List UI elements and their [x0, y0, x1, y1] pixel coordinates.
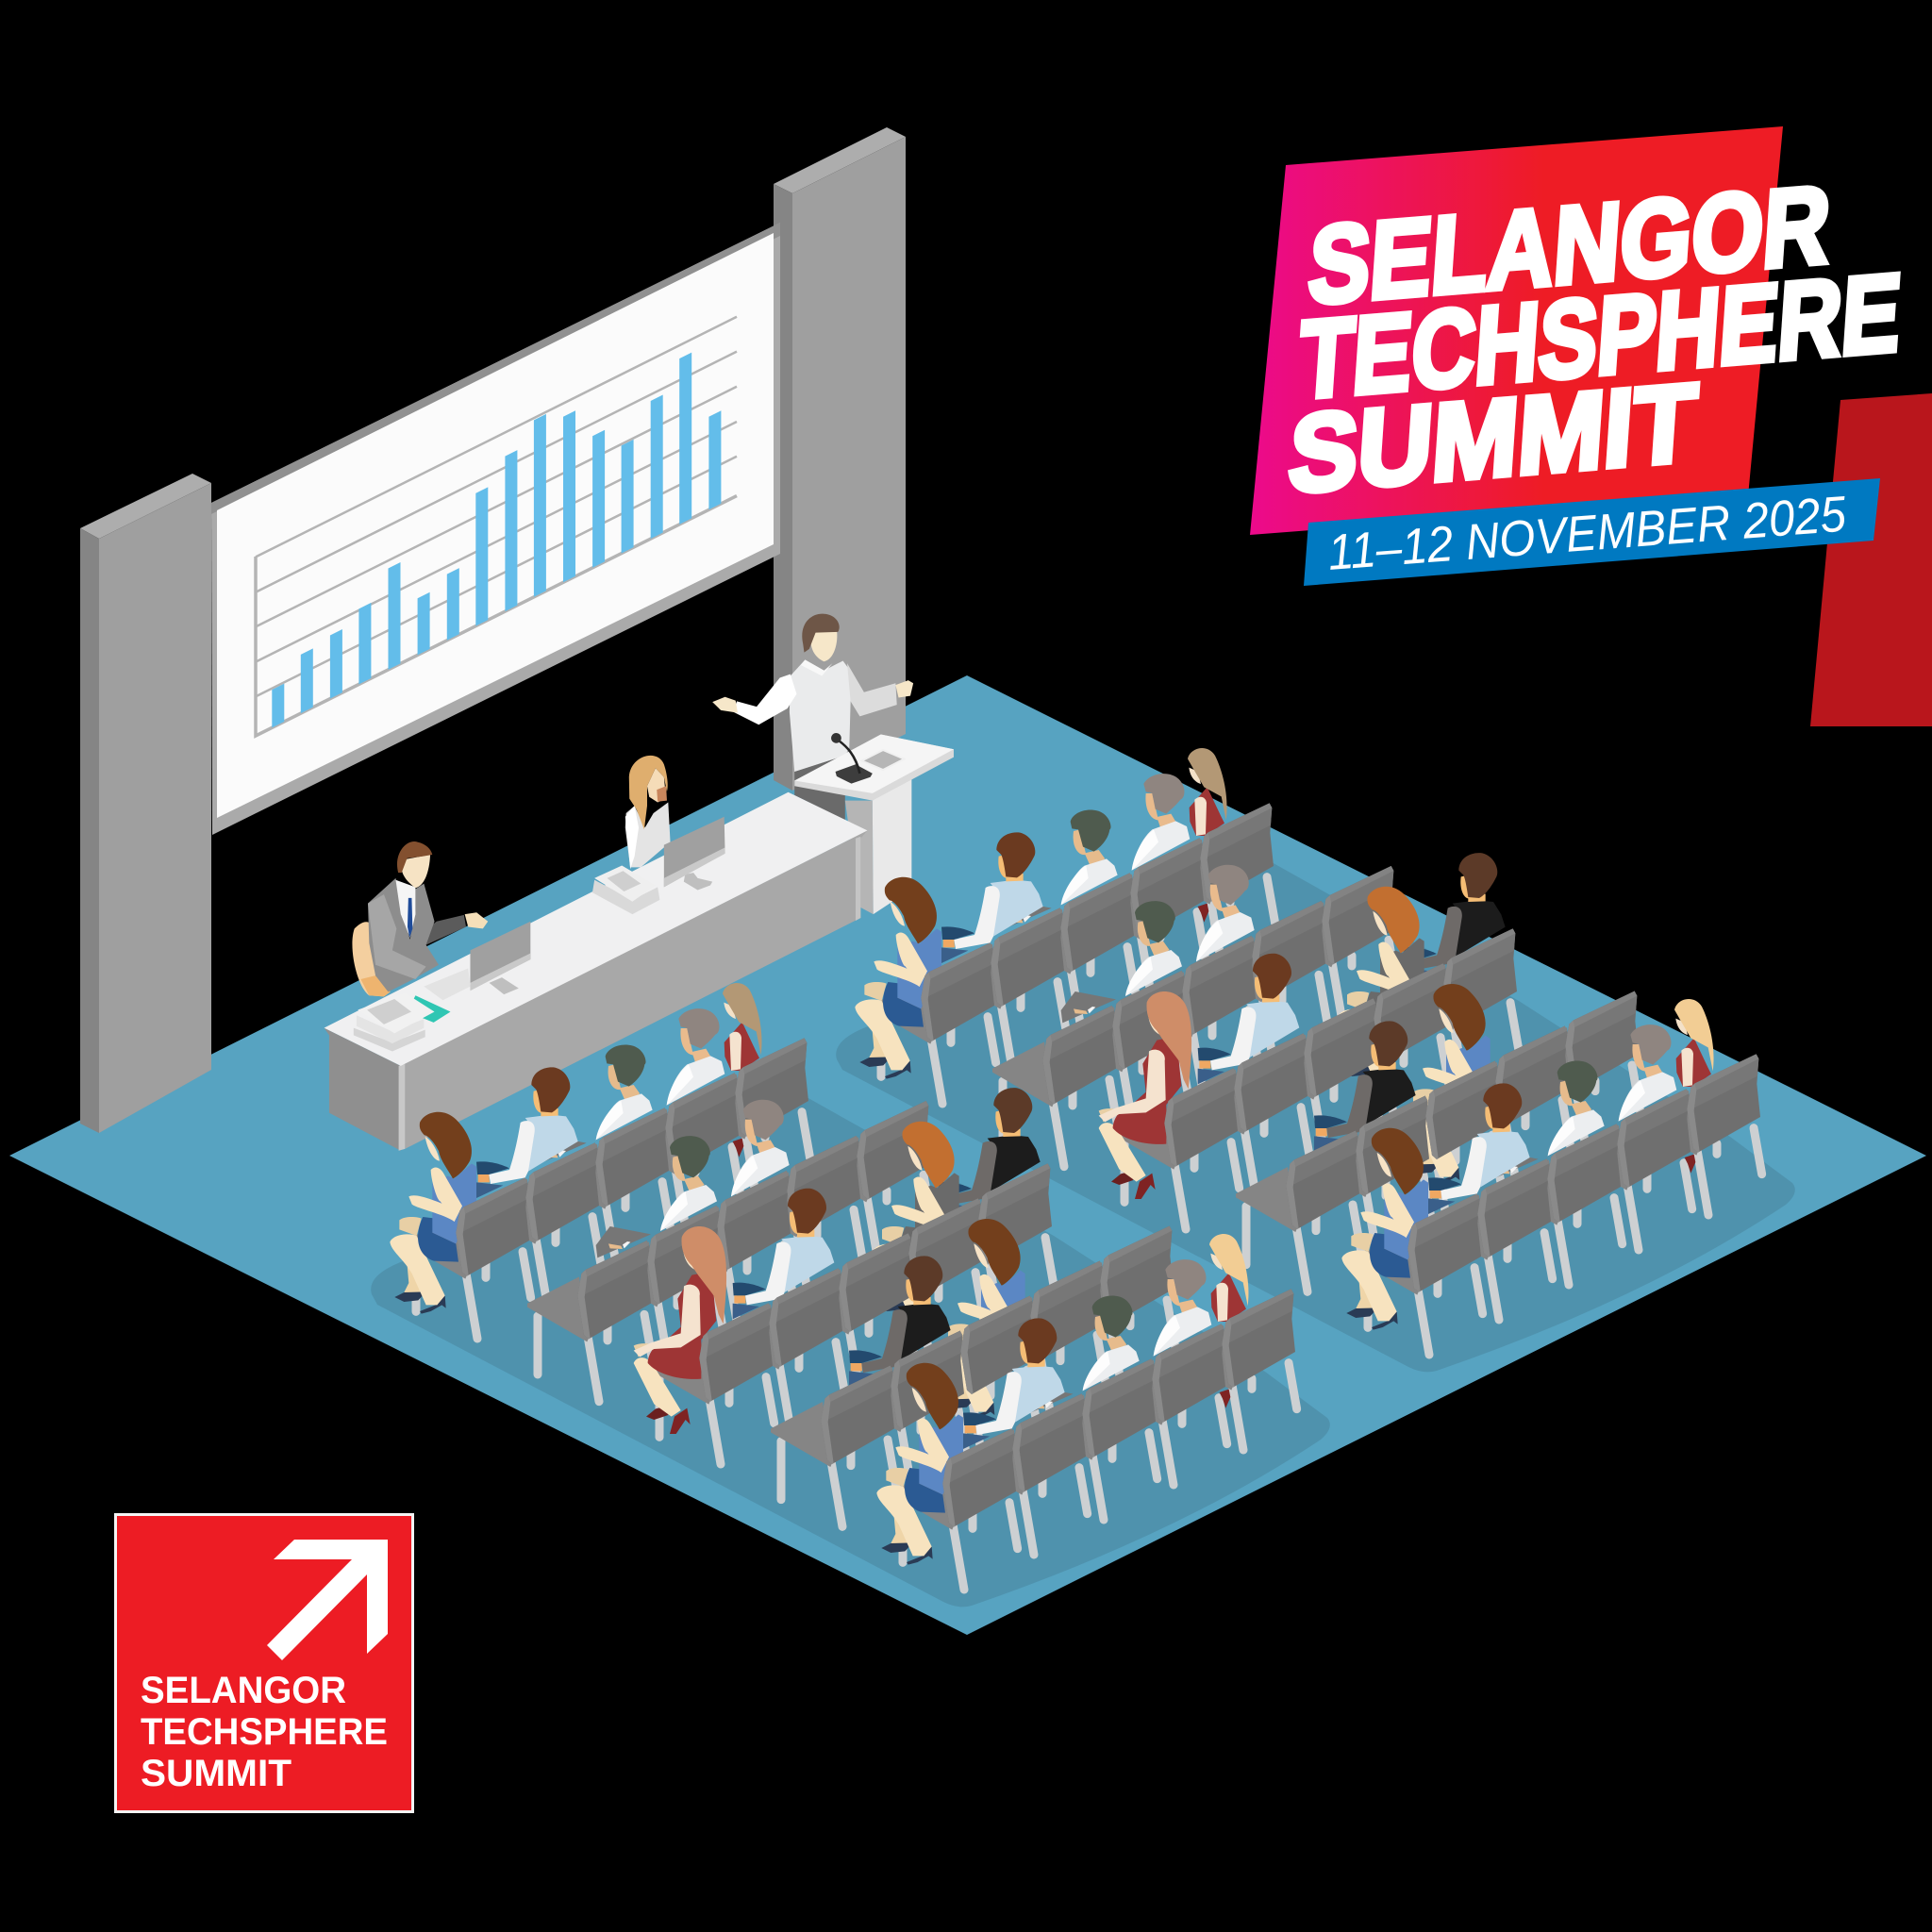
floor: [9, 675, 1926, 1635]
rear seating block: [855, 748, 1762, 1355]
front seating block: [390, 983, 1297, 1590]
row 1: [855, 748, 1275, 1104]
row 5: [1341, 999, 1762, 1355]
man in suit: [352, 841, 488, 996]
logo wordmark: [141, 1670, 388, 1794]
presentation screen: [211, 223, 780, 835]
paper stack, left: [354, 993, 451, 1052]
row 4: [1236, 984, 1641, 1291]
row 2: [992, 865, 1397, 1167]
row 3: [1099, 853, 1519, 1229]
floor shadow: rear seating block: [836, 847, 1795, 1372]
date banner: 11–12 NOVEMBER 2025: [1325, 487, 1848, 581]
microphone: [831, 733, 873, 784]
title: SUMMIT: [1285, 360, 1700, 516]
row 2: [527, 1100, 932, 1402]
monitor, right: [664, 817, 725, 890]
seated woman at desk: [625, 756, 671, 869]
row 5: [876, 1234, 1297, 1590]
title: SELANGOR: [1305, 162, 1834, 327]
floor shadow: front seating block: [371, 1082, 1330, 1607]
row 1: [390, 983, 810, 1339]
paper stack, right: [592, 865, 659, 914]
podium: [794, 733, 954, 914]
speaker at podium: [712, 614, 913, 821]
logo wordmark: SUMMIT: [141, 1753, 291, 1794]
desk: [325, 792, 867, 1151]
logo badge: [115, 1515, 413, 1811]
paper on podium: [862, 750, 904, 770]
decorative dark red block: [1810, 393, 1932, 726]
row 4: [771, 1219, 1175, 1526]
left pillar: [80, 474, 211, 1133]
stage: speakers, desk and podium: [325, 614, 954, 1151]
icon: arrow: [267, 1540, 388, 1660]
row 3: [634, 1088, 1054, 1464]
right pillar: [774, 127, 906, 791]
gradient title panel: [1250, 126, 1783, 535]
bar chart: [256, 317, 737, 736]
logo wordmark: TECHSPHERE: [141, 1711, 388, 1753]
monitor and keyboard, left: [424, 922, 530, 1000]
title: [1285, 162, 1905, 516]
logo wordmark: SELANGOR: [141, 1670, 346, 1711]
